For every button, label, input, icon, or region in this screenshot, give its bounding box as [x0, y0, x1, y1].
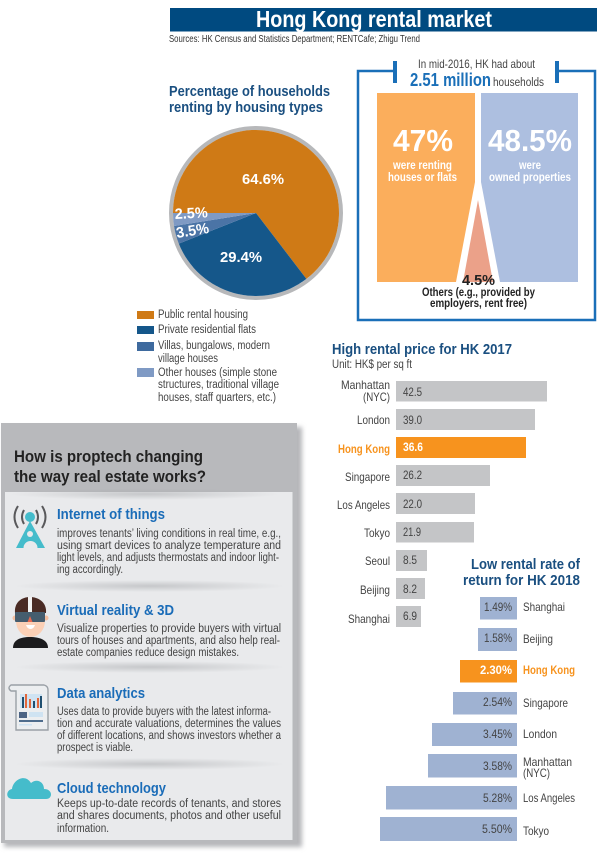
bar chart: low rental rate of return: Tokyo	[523, 824, 549, 838]
panel: 2.51 million households: households	[493, 77, 544, 89]
panel: 2.51 million households: 4.5%	[462, 273, 495, 289]
bar chart: high rental price: 6.9	[403, 609, 417, 623]
text: data analytics: of different locations, and shows investors whether a	[57, 730, 282, 742]
bar chart: high rental price: Hong Kong	[338, 442, 390, 456]
text: cloud technology: Keeps up-to-date records of tenants, and stores	[57, 798, 281, 810]
panel: 2.51 million households: were renting	[392, 160, 452, 172]
panel: 2.51 million households: employers, rent free)	[430, 298, 527, 310]
bar chart: high rental price: 21.9	[403, 525, 421, 539]
bar chart: low rental rate of return: Los Angeles	[523, 791, 575, 805]
pie legend: houses, staff quarters, etc.)	[158, 392, 276, 404]
text: cloud technology: information.	[57, 823, 109, 835]
bar chart: high rental price: 8.5	[403, 553, 417, 567]
text: data analytics: Data analytics	[57, 685, 145, 702]
bar chart: high rental price	[337, 378, 547, 627]
text: data analytics	[57, 685, 282, 754]
text: virtual reality: tours of houses and apartments, and also help real-	[57, 635, 280, 647]
bar chart: low rental rate of return: 5.50%	[482, 822, 512, 836]
pie legend: Villas, bungalows, modern	[158, 340, 270, 352]
bar chart: high rental price: London	[357, 413, 390, 427]
bar chart: high rental price: Tokyo	[364, 526, 390, 540]
heading: low rental rate of return: Low rental rate of	[471, 556, 581, 573]
text: internet of things: Internet of things	[57, 506, 165, 523]
text: virtual reality: Visualize properties to provide buyers with virtual	[57, 623, 281, 635]
panel: 2.51 million households: 48.5%	[488, 123, 572, 158]
bar chart: high rental price: 22.0	[403, 497, 422, 511]
bar chart: low rental rate of return	[380, 597, 575, 841]
bar chart: high rental price: Los Angeles	[337, 498, 390, 512]
text: cloud technology	[57, 780, 281, 835]
bar chart: high rental price: Singapore	[345, 470, 390, 484]
text: internet of things: improves tenants’ living conditions in real time, e.g.,	[57, 528, 281, 540]
icon: cloud	[7, 778, 51, 799]
bar chart: low rental rate of return: Shanghai	[523, 600, 565, 614]
pie chart: housing types: 2.5%	[174, 204, 208, 223]
bar chart: high rental price: Seoul	[365, 554, 390, 568]
text: virtual reality: estate companies reduce design mistakes.	[57, 647, 239, 659]
heading: percentage of households: Percentage of households	[169, 83, 330, 100]
bar chart: high rental price: 26.2	[403, 468, 422, 482]
icon: antenna	[14, 506, 46, 548]
bar chart: high rental price: 36.6	[403, 440, 423, 454]
heading: high rental price: High rental price for HK 2017	[332, 341, 512, 358]
bar chart: low rental rate of return: 3.58%	[483, 759, 512, 773]
panel: 2.51 million households: houses or flats	[388, 172, 457, 184]
panel: 2.51 million households: were	[518, 160, 541, 172]
text: data analytics: tion and accurate valuations, determines the values	[57, 718, 281, 730]
panel heading: How is proptech changing	[14, 447, 203, 466]
pie legend: Other houses (simple stone	[158, 367, 277, 379]
pie legend: village houses	[158, 353, 218, 365]
bar chart: low rental rate of return: (NYC)	[523, 766, 550, 780]
bar chart: high rental price: 8.2	[403, 582, 417, 596]
text: internet of things: using smart devices to analyze temperature and	[57, 540, 281, 552]
panel: 2.51 million households: In mid-2016, HK had about	[418, 57, 536, 71]
pie chart: housing types: 64.6%	[242, 171, 284, 188]
panel: proptech	[1, 423, 302, 847]
text: virtual reality	[57, 602, 281, 659]
panel: 2.51 million households	[358, 57, 595, 320]
sources line: Sources: HK Census and Statistics Department; RENTCafe; Zhigu Trend	[169, 33, 420, 45]
heading: percentage of households: renting by housing types	[169, 99, 323, 116]
heading: high rental price: Unit: HK$ per sq ft	[332, 359, 413, 371]
panel: 2.51 million households: owned properties	[489, 172, 571, 184]
panel heading	[14, 447, 206, 486]
pie chart: housing types: 3.5%	[175, 220, 210, 242]
icon: virtual reality person	[12, 597, 48, 648]
bar chart: low rental rate of return: 1.49%	[484, 600, 512, 614]
bar chart: low rental rate of return: 5.28%	[483, 791, 512, 805]
bar chart: high rental price: Shanghai	[348, 612, 390, 626]
bar chart: low rental rate of return: Singapore	[523, 696, 568, 710]
heading: low rental rate of return: return for HK 2018	[463, 572, 580, 589]
bar chart: low rental rate of return: 2.54%	[483, 695, 512, 709]
bar chart: high rental price: (NYC)	[363, 390, 390, 404]
bar chart: high rental price: Manhattan	[341, 378, 390, 392]
bar chart: high rental price: 39.0	[403, 413, 422, 427]
panel: 2.51 million households: 47%	[393, 123, 453, 158]
bar chart: low rental rate of return: 2.30%	[480, 663, 512, 677]
bar chart: low rental rate of return: Beijing	[523, 632, 553, 646]
panel heading: the way real estate works?	[14, 467, 206, 486]
pie legend: Public rental housing	[158, 309, 248, 321]
bar chart: low rental rate of return: 3.45%	[483, 727, 512, 741]
bar chart: low rental rate of return: 1.58%	[484, 631, 512, 645]
bar chart: low rental rate of return: Manhattan	[523, 755, 572, 769]
panel: 2.51 million households: Others (e.g., provided by	[422, 287, 536, 299]
heading: high rental price	[332, 341, 512, 371]
text: internet of things: light levels, and adjusts thermostats and indoor light-	[57, 552, 279, 564]
pie legend: structures, traditional village	[158, 379, 279, 391]
text: data analytics: Uses data to provide buyers with the latest informa-	[57, 706, 271, 718]
heading: low rental rate of return	[463, 556, 581, 589]
text: cloud technology: Cloud technology	[57, 780, 167, 797]
text: internet of things: ing accordingly.	[57, 564, 123, 576]
pie chart: housing types: 29.4%	[220, 249, 262, 266]
bar chart: high rental price: Beijing	[360, 583, 390, 597]
text: internet of things	[57, 506, 281, 576]
pie legend	[137, 309, 279, 404]
icon: data report	[9, 685, 48, 730]
panel: 2.51 million households: 2.51 million	[410, 70, 491, 90]
title banner: Hong Kong rental market	[256, 6, 492, 32]
heading: percentage of households	[169, 83, 330, 116]
bar chart: low rental rate of return: Hong Kong	[523, 663, 575, 677]
bar chart: high rental price: 42.5	[403, 385, 422, 399]
title banner	[170, 6, 597, 32]
text: cloud technology: and shares documents, photos and other useful	[57, 810, 281, 822]
pie legend: Private residential flats	[158, 324, 256, 336]
pie chart: housing types	[171, 128, 341, 298]
bar chart: low rental rate of return: London	[523, 727, 557, 741]
text: data analytics: prospect is viable.	[57, 742, 133, 754]
text: virtual reality: Virtual reality & 3D	[57, 602, 174, 619]
